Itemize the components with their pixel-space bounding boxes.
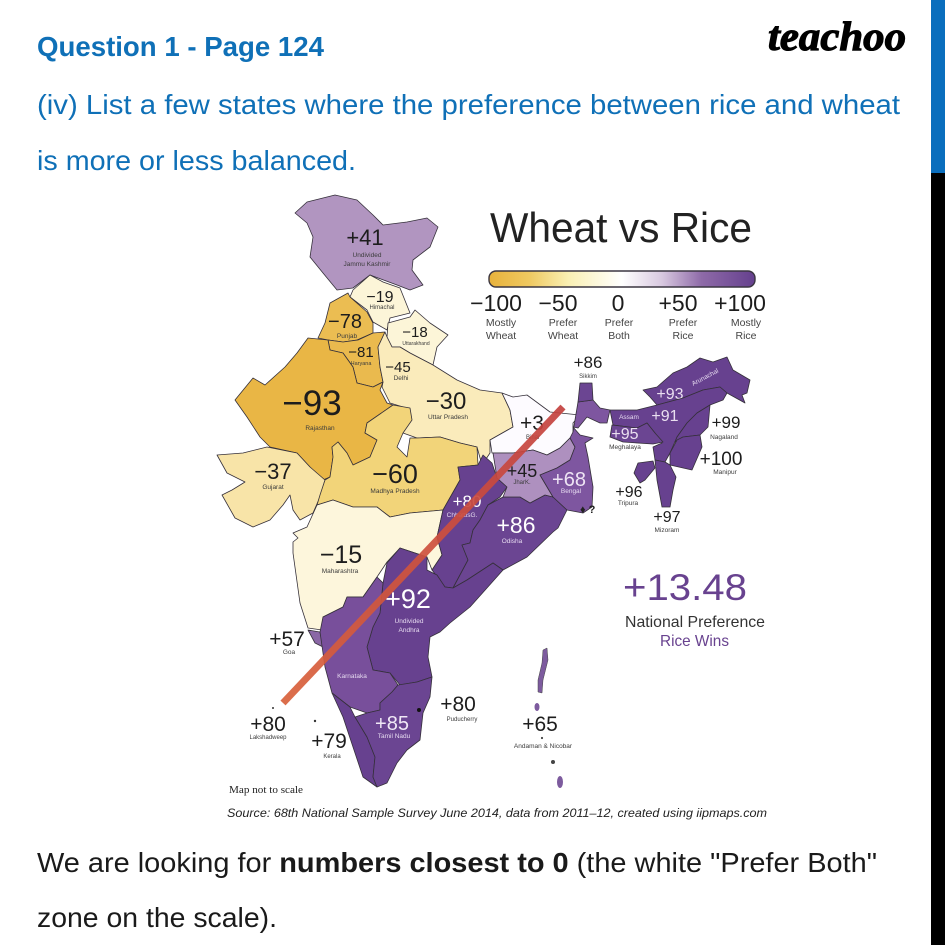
sidebar accent — [931, 0, 945, 945]
state: Mizoram: Mizoram — [655, 527, 679, 534]
state: West Bengal: ♦ ? — [580, 504, 596, 516]
territory: Lakshadweep — [249, 707, 316, 741]
state: Madhya Pradesh — [317, 405, 478, 517]
map note: Map not to scale — [229, 785, 304, 796]
scale labels: Rice — [735, 330, 757, 342]
state: Uttar Pradesh and Delhi: −30 — [426, 388, 466, 415]
state: Sikkim — [574, 353, 602, 402]
state: Odisha — [453, 495, 567, 588]
state: Karnataka: Karnataka — [337, 673, 367, 680]
state: Mizoram: +97 — [653, 509, 681, 526]
state: Rajasthan: Rajasthan — [305, 425, 335, 432]
state: Madhya Pradesh: Madhya Pradesh — [370, 488, 420, 495]
state: Uttar Pradesh and Delhi: Delhi — [394, 375, 408, 382]
scale labels: −50 — [538, 290, 578, 316]
state: Gujarat: Gujarat — [262, 484, 284, 491]
state: Jammu Kashmir: Jammu Kashmir — [344, 261, 391, 268]
state: Sikkim: +86 — [574, 353, 602, 372]
territory: Puducherry: Puducherry — [447, 717, 477, 723]
state: Uttar Pradesh and Delhi: −45 — [385, 359, 411, 376]
legend: colour scale — [470, 271, 766, 342]
state: Arunachal — [643, 357, 750, 405]
state: Himachal — [350, 275, 410, 330]
answer text: zone on the scale). — [37, 902, 277, 933]
state: Bihar — [490, 393, 580, 455]
state: Meghalaya: +95 — [611, 426, 639, 443]
state: Haryana: −81 — [348, 344, 374, 361]
state: Gujarat — [217, 447, 325, 527]
national preference callout: Rice Wins — [660, 633, 729, 650]
state: Odisha: +86 — [496, 512, 536, 538]
scale labels: Mostly — [731, 317, 762, 329]
state: Tripura: Tripura — [618, 500, 639, 507]
scale labels: +100 — [714, 290, 766, 316]
state: Undivided Andhra: +92 — [385, 584, 431, 614]
state: Himachal: Himachal — [369, 305, 395, 311]
territory: Lakshadweep: +80 — [250, 713, 286, 736]
national preference callout: National Preference — [625, 614, 765, 631]
state: Karnataka — [320, 577, 398, 713]
scale labels: Mostly — [486, 317, 517, 329]
state: Nagaland — [675, 405, 740, 442]
state: Gujarat: −37 — [254, 459, 292, 484]
state: Jammu Kashmir: +41 — [346, 225, 384, 250]
state: Uttar Pradesh and Delhi — [378, 332, 513, 465]
state: Jharkhand: JharK. — [513, 480, 531, 486]
source note: Source: 68th National Sample Survey June 2014, data from 2011–12, created using iipmaps.com — [227, 806, 767, 820]
state: Bihar: Bihar — [526, 435, 540, 441]
state: Sikkim: Sikkim — [579, 374, 597, 380]
state: Rajasthan: −93 — [282, 384, 342, 423]
red diagonal line — [283, 407, 563, 703]
state: Meghalaya — [609, 423, 663, 451]
state: Undivided Andhra: Undivided — [395, 618, 424, 625]
scale labels: 0 — [612, 290, 624, 316]
state: Assam — [610, 387, 727, 462]
state: Nagaland: +99 — [712, 413, 740, 432]
state: Goa: +57 — [269, 628, 305, 651]
state: Chhattisgarh: ChhattisG. — [447, 512, 478, 519]
state: Jammu Kashmir: Undivided — [353, 252, 382, 259]
state: Assam: Assam — [619, 414, 639, 421]
state: West Bengal: Bengal — [561, 488, 582, 495]
state: Kerala — [311, 693, 377, 787]
answer text: We are looking for numbers closest to 0 (the white "Prefer Both" — [37, 847, 877, 878]
state: Madhya Pradesh: −60 — [372, 459, 418, 489]
scale labels — [470, 290, 766, 342]
state: Jammu Kashmir — [295, 195, 438, 290]
state: Manipur: +100 — [700, 449, 742, 470]
territory: Andaman and Nicobar — [514, 648, 573, 788]
scale labels: +50 — [658, 290, 698, 316]
territory: Andaman and Nicobar: Andaman & Nicobar — [514, 743, 573, 750]
scale labels: −100 — [470, 290, 522, 316]
state: Tamil Nadu — [355, 677, 432, 787]
state: Tamil Nadu: Tamil Nadu — [378, 733, 411, 740]
state: Punjab: Punjab — [337, 333, 357, 340]
territory: Lakshadweep: Lakshadweep — [249, 735, 287, 741]
state: West Bengal — [540, 400, 610, 516]
state: Goa — [269, 628, 323, 656]
state: Kerala: Kerala — [323, 754, 341, 760]
question text: (iv) List a few states where the preference between rice and wheat — [37, 89, 900, 120]
state: Undivided Andhra: Andhra — [399, 627, 420, 634]
teachoo logo: teachoo — [768, 13, 906, 59]
state: Rajasthan — [235, 338, 393, 480]
state: Nagaland: Nagaland — [710, 434, 738, 441]
scale labels: Wheat — [486, 330, 516, 342]
state: Arunachal: Arunachal — [691, 367, 720, 388]
scale labels: Prefer — [605, 317, 634, 329]
state: Undivided Andhra — [367, 548, 503, 685]
scale labels: Rice — [672, 330, 694, 342]
state: Arunachal: +93 — [656, 386, 684, 403]
state: Uttarakhand: Uttarakhand — [402, 341, 430, 347]
state: Bihar: +3 — [520, 412, 544, 435]
scale labels: Both — [608, 330, 630, 342]
state: Manipur: Manipur — [713, 469, 738, 476]
state: Mizoram — [653, 460, 681, 534]
territory: Andaman and Nicobar: +65 — [522, 713, 558, 736]
state: Uttar Pradesh and Delhi: Uttar Pradesh — [428, 414, 468, 421]
state: Haryana: Haryana — [351, 361, 372, 367]
map of India — [217, 195, 750, 788]
answer text — [37, 847, 877, 933]
scale labels: Prefer — [669, 317, 698, 329]
question heading: Question 1 - Page 124 — [37, 31, 324, 62]
state: Chhattisgarh — [432, 455, 507, 588]
question text: is more or less balanced. — [37, 145, 356, 176]
state: Manipur — [670, 435, 742, 476]
state: Uttarakhand: −18 — [402, 324, 428, 341]
state: Maharashtra: Maharashtra — [322, 568, 359, 575]
state: Punjab: −78 — [328, 311, 362, 333]
map title: Wheat vs Rice — [490, 204, 752, 251]
state: Haryana — [328, 332, 385, 387]
state: Jharkhand — [493, 438, 575, 503]
state: Maharashtra — [293, 500, 443, 630]
state: Jharkhand: +45 — [507, 461, 537, 481]
territory: Puducherry: +80 — [440, 693, 476, 716]
state: Himachal: −19 — [366, 289, 394, 306]
scale labels: Prefer — [549, 317, 578, 329]
state: Maharashtra: −15 — [320, 541, 362, 569]
state: Goa: Goa — [283, 649, 296, 656]
state: Odisha: Odisha — [502, 538, 523, 545]
gradient bar — [489, 271, 755, 287]
state: West Bengal: +68 — [552, 469, 586, 491]
state: Uttarakhand — [387, 310, 448, 365]
state: Tripura: +96 — [615, 484, 643, 501]
scale labels: Wheat — [548, 330, 578, 342]
state: Tamil Nadu: +85 — [375, 713, 409, 735]
state: Assam: +91 — [651, 408, 679, 425]
state: Kerala: +79 — [311, 730, 347, 753]
state: Tripura — [615, 461, 655, 507]
national preference callout: +13.48 — [623, 567, 747, 608]
national preference callout — [623, 567, 765, 650]
state: Meghalaya: Meghalaya — [609, 444, 641, 451]
territory: Puducherry — [417, 693, 477, 723]
state: Chhattisgarh: +80 — [453, 492, 481, 511]
question text — [37, 89, 900, 176]
state: Punjab — [318, 293, 373, 342]
